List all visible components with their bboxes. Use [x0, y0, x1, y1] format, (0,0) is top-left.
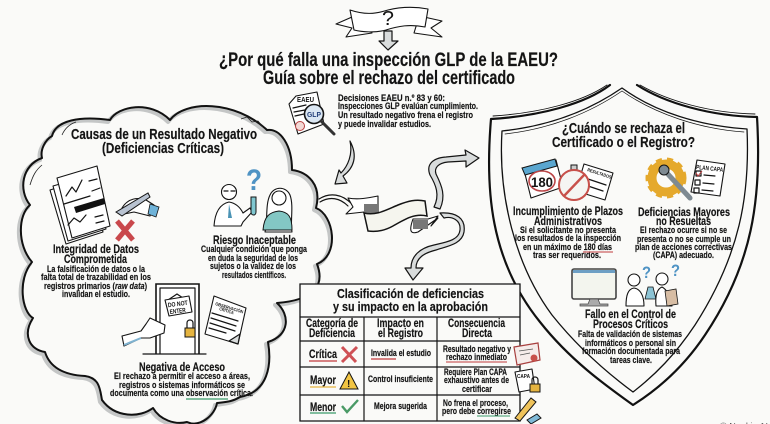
row: major: Requiere Plan CAPA — [444, 367, 507, 377]
row: major: certificar — [462, 384, 492, 394]
cloud heading — [71, 127, 257, 157]
row: minor — [310, 398, 511, 416]
row: major: Control insuficiente — [368, 374, 433, 384]
icon: gear, wrench and CAPA plan: PLAN CAPA — [696, 164, 724, 174]
shield heading: Certificado o el Registro? — [552, 135, 695, 151]
text: critical process control failure: Fallo en el Control de — [585, 309, 676, 321]
icon: monitor and staff with questions: ? — [671, 261, 680, 280]
title: ¿Por qué falla una inspección GLP de la EAEU? — [219, 50, 558, 71]
ribbon front — [364, 200, 427, 231]
text: critical process control failure: tareas clave. — [610, 355, 652, 366]
table heading: y su impacto en la aprobación — [333, 299, 488, 314]
text: data integrity: Comprometida — [64, 254, 127, 266]
text: access refusal: Negativa de Acceso — [139, 362, 225, 374]
icon: scientist and worried patient — [214, 164, 292, 232]
text: data integrity — [41, 244, 151, 300]
text: access refusal: registros o sistemas informáticos se — [119, 380, 245, 391]
text: missed deadlines: tras ser requeridos. — [533, 250, 601, 261]
icon: gear, wrench and CAPA plan — [648, 160, 725, 198]
icon: falsified data papers, pen and red cross — [50, 166, 159, 244]
table column headers: Deficiencia — [309, 328, 355, 340]
text: access refusal: documenta como una observación crítica. — [110, 388, 253, 399]
text: critical process control failure: formación documentada para — [582, 346, 680, 357]
icon: CAPA plan and padlock: CAPA — [517, 374, 530, 380]
shield heading — [552, 121, 695, 151]
icon: pencil and eraser — [515, 398, 541, 424]
text: data integrity: invalidan el estudio. — [62, 289, 130, 300]
arrow: intro to banner — [335, 141, 354, 184]
row: major: Mayor — [310, 375, 336, 387]
text: critical process control failure: informáticos o personal sin — [585, 338, 676, 349]
row: minor: No frena el proceso, — [443, 398, 508, 408]
shield heading: ¿Cuándo se rechaza el — [562, 121, 685, 137]
text: unacceptable risk: Cualquier condición que ponga — [201, 244, 307, 255]
row: critical — [309, 344, 511, 362]
row: minor: Mejora sugerida — [374, 401, 428, 411]
arrow: to table — [405, 213, 464, 280]
intro text: decisions EAEU: y puede invalidar estudios. — [338, 119, 431, 130]
text: data integrity: falta total de trazabilidad en los — [41, 272, 151, 283]
row: critical: Invalida el estudio — [371, 348, 431, 358]
icon: certificate — [514, 343, 540, 365]
text: unacceptable risk: en duda la seguridad de los — [208, 253, 298, 264]
icon: locked door with hand and observation report: CRÍTICA — [219, 306, 235, 316]
ribbon back folds — [346, 196, 438, 233]
text: data integrity: registros primarios (raw data) — [44, 281, 147, 292]
text: unresolved major deficiencies: presenta o no se cumple un — [637, 234, 731, 245]
text: unacceptable risk — [201, 235, 307, 281]
icon: calendar 180, stopwatch and results page: 180 — [531, 174, 553, 190]
central ribbon with connecting arrows — [319, 150, 479, 280]
icon: locked door with hand and observation report: OBSERVACIÓN — [215, 301, 244, 314]
top ribbon with question mark and arrow — [336, 7, 442, 50]
text: missed deadlines: en un máximo de 180 días — [523, 242, 612, 253]
text: data integrity: Integridad de Datos — [53, 244, 139, 256]
row: critical: Resultado negativo y — [443, 344, 511, 354]
text: unacceptable risk: Riesgo Inaceptable — [213, 235, 296, 247]
icon: calendar 180, stopwatch and results page: RESULTADOS — [587, 167, 612, 180]
table column headers: Impacto en — [377, 318, 424, 330]
text: missed deadlines: Administrativos — [534, 216, 602, 228]
text: unresolved major deficiencies: Deficiencias Mayores — [638, 207, 730, 219]
table column headers — [306, 318, 505, 340]
row: major: ! — [347, 379, 350, 390]
row: critical: Crítica — [309, 349, 337, 361]
icon: EAEU GLP document with magnifier: GLP — [307, 110, 321, 119]
icon: EAEU GLP document with magnifier: EAEU — [297, 97, 314, 104]
row: major — [310, 367, 509, 394]
text: unacceptable risk: sujetos o la validez de los — [210, 261, 296, 272]
panel: rejection shield — [489, 85, 758, 405]
cloud outline — [19, 106, 332, 424]
table heading: Clasificación de deficiencias — [337, 286, 484, 301]
panel: causes cloud — [19, 106, 332, 424]
table heading — [333, 286, 488, 314]
row: major: exhaustivo antes de — [444, 375, 509, 385]
intro text: decisions EAEU: Decisiones EAEU n.º 83 y 60: — [338, 93, 445, 104]
icon: monitor and staff with questions — [572, 261, 680, 306]
title: Guía sobre el rechazo del certificado — [263, 68, 515, 89]
text: data integrity: La falsificación de datos o la — [47, 264, 145, 275]
text: unresolved major deficiencies: no Resueltas — [656, 216, 711, 228]
text: missed deadlines: los resultados de la inspección — [515, 233, 621, 244]
top ribbon with question mark and arrow: ? — [382, 8, 394, 30]
table column headers: Categoría de — [306, 318, 358, 330]
text: unresolved major deficiencies — [635, 207, 732, 261]
text: unresolved major deficiencies: (CAPA) adecuado. — [653, 250, 714, 261]
text: missed deadlines: Si el solicitante no presenta — [520, 225, 617, 236]
icon: locked door with hand and observation report — [122, 284, 246, 354]
icon: scientist and worried patient: ? — [246, 164, 262, 197]
table column headers: el Registro — [378, 328, 423, 340]
text: unacceptable risk: resultados científicos. — [222, 270, 286, 281]
arrow: to shield — [429, 150, 479, 209]
text: critical process control failure — [578, 309, 682, 366]
icon: locked door with hand and observation report: DO NOT — [167, 300, 188, 309]
text: unresolved major deficiencies: El rechazo ocurre si no se — [640, 225, 727, 236]
icon: calendar 180, stopwatch and results page — [522, 159, 613, 200]
intro text: decisions EAEU — [338, 93, 478, 130]
table column headers: Consecuencia — [448, 318, 505, 330]
intro text: decisions EAEU: Inspecciones GLP evalúan cumplimiento. — [338, 101, 478, 112]
cloud heading: Causas de un Resultado Negativo — [71, 127, 257, 143]
row: minor: Menor — [310, 402, 336, 414]
arrow: link from cloud to ribbon — [319, 195, 352, 206]
shield outline — [489, 85, 758, 405]
icon: locked door with hand and observation report: ENTER — [169, 307, 186, 316]
text: critical process control failure: Procesos Críticos — [593, 319, 668, 331]
text: critical process control failure: Falta de validación de sistemas — [578, 329, 682, 340]
icon: CAPA plan and padlock — [515, 369, 540, 392]
icon: EAEU GLP document with magnifier — [289, 92, 334, 134]
text: access refusal — [110, 362, 253, 399]
icon: monitor and staff with questions: ? — [642, 263, 651, 282]
text: missed deadlines — [513, 206, 623, 261]
panel: deficiency classification table — [300, 284, 541, 424]
cloud heading: (Deficiencias Críticas) — [102, 141, 224, 157]
intro text: decisions EAEU: Un resultado negativo frena el registro — [338, 110, 473, 121]
title — [219, 50, 558, 89]
row: minor: pero debe corregirse — [442, 406, 511, 416]
text: unresolved major deficiencies: plan de acciones correctivas — [635, 242, 732, 253]
table column headers: Directa — [462, 328, 492, 340]
text: missed deadlines: Incumplimiento de Plazos — [513, 206, 623, 218]
text: access refusal: El rechazo a permitir el acceso a áreas, — [114, 371, 250, 382]
row: critical: rechazo inmediato — [446, 352, 507, 362]
